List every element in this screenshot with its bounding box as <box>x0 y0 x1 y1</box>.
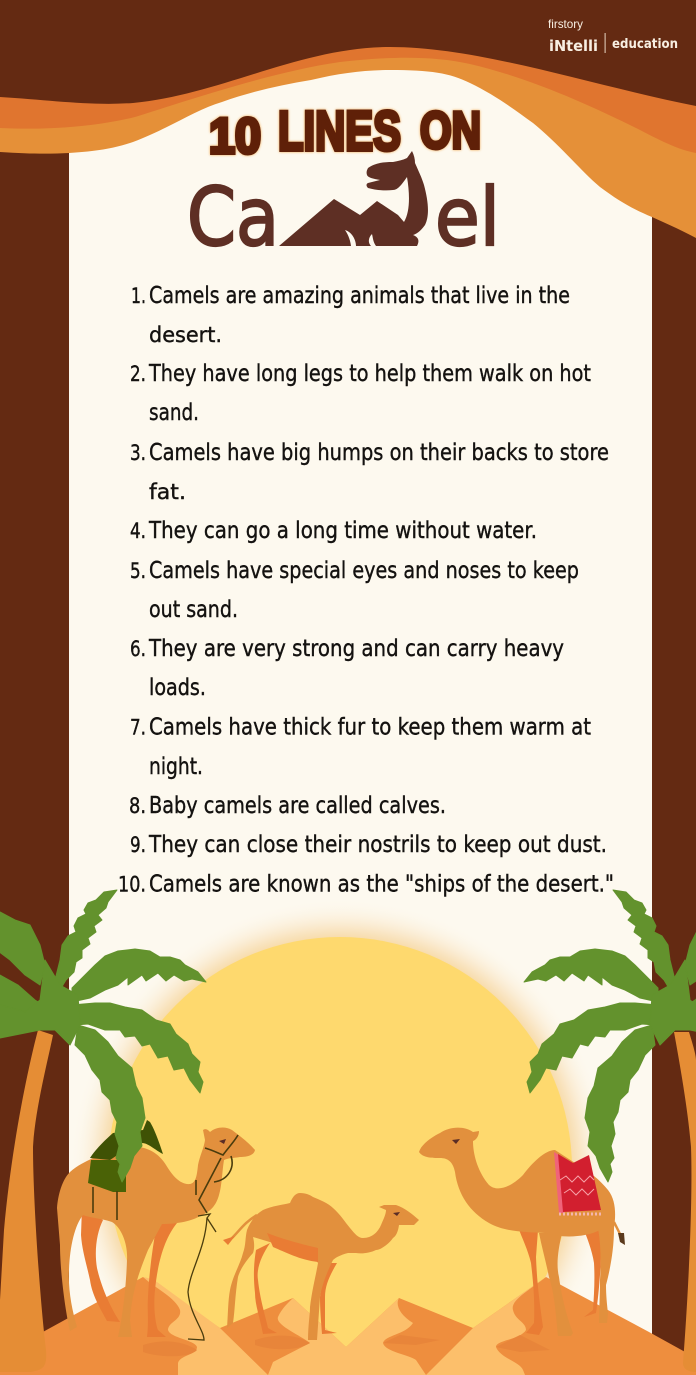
line 6: loads. <box>149 675 206 701</box>
camel and pyramids glyph <box>279 151 428 246</box>
wave: dark orange <box>0 47 696 240</box>
education wordmark: education <box>612 37 678 52</box>
far legs <box>81 1207 177 1337</box>
far legs <box>254 1243 337 1334</box>
line 10: 10. <box>118 872 146 896</box>
letters el: el <box>435 171 500 264</box>
firstory wordmark: firstory <box>548 17 583 31</box>
line 1: desert. <box>149 323 222 348</box>
left camel <box>57 1120 255 1340</box>
right palm leaves <box>524 890 696 1182</box>
saddle <box>90 1120 163 1160</box>
line 2: 2. <box>130 362 146 386</box>
title: 10 lines on: 10 <box>209 108 261 164</box>
line 8: Baby camels are called calves. <box>149 793 446 819</box>
line 2: sand. <box>149 400 199 426</box>
panel: cream content area <box>69 200 652 1375</box>
title: 10 lines on: ON <box>420 102 481 160</box>
line 6 <box>130 636 564 701</box>
line 9: 9. <box>130 833 146 857</box>
line 3: Camels have big humps on their backs to store <box>149 440 609 466</box>
line 9: They can close their nostrils to keep out dust. <box>148 832 607 858</box>
sun glow <box>70 899 610 1375</box>
line 6: 6. <box>130 637 146 661</box>
blanket border <box>554 1152 564 1213</box>
line 3: 3. <box>130 441 146 465</box>
title: 10 lines on <box>209 99 481 164</box>
line 3 <box>130 440 609 505</box>
left brown side <box>0 152 69 300</box>
blanket pattern <box>560 1176 594 1195</box>
line 1: Camels are amazing animals that live in the <box>149 283 570 309</box>
panel top fill <box>69 70 652 300</box>
line 6: They are very strong and can carry heavy <box>148 636 564 662</box>
line 8: 8. <box>129 794 146 818</box>
rope <box>188 1214 216 1340</box>
line 2 <box>130 361 591 426</box>
line 4: 4. <box>130 519 146 543</box>
sun <box>108 937 572 1375</box>
line 7 <box>130 714 591 780</box>
brand logo <box>548 17 678 55</box>
left palm trunk <box>0 1030 53 1372</box>
eye <box>219 1139 226 1144</box>
sand dunes <box>0 1277 696 1375</box>
logo divider <box>605 33 606 53</box>
body <box>419 1128 615 1236</box>
right camel <box>419 1128 625 1336</box>
line 7: night. <box>149 754 203 780</box>
tail tuft <box>223 1236 235 1245</box>
line 1 <box>131 283 570 348</box>
line 5: out sand. <box>149 597 238 623</box>
title: camel wordmark <box>187 151 500 264</box>
tail tuft <box>618 1233 625 1245</box>
saddle straps and bridle <box>93 1135 238 1220</box>
body <box>57 1128 255 1337</box>
letters Ca: Ca <box>187 171 279 264</box>
title: 10 lines on: LINES <box>278 99 401 162</box>
middle camel <box>223 1193 419 1340</box>
eye <box>452 1139 460 1144</box>
line 7: Camels have thick fur to keep them warm at <box>149 714 591 740</box>
far legs <box>518 1227 601 1335</box>
wave: light orange <box>0 58 696 240</box>
glyph arch cutouts <box>345 230 376 246</box>
intelli wordmark: iNtelli <box>549 37 598 55</box>
line 7: 7. <box>130 716 146 740</box>
numbered list of ten lines <box>118 283 614 898</box>
near legs <box>539 1228 614 1336</box>
line 3: fat. <box>149 480 186 505</box>
tail <box>614 1222 621 1236</box>
line 5 <box>130 558 579 623</box>
tail <box>232 1215 257 1238</box>
body <box>227 1193 419 1340</box>
right brown side <box>652 217 696 300</box>
blanket fringe <box>559 1212 601 1216</box>
line 10: Camels are known as the "ships of the desert." <box>149 872 614 898</box>
line 5: 5. <box>130 559 146 583</box>
line 2: They have long legs to help them walk on hot <box>148 361 591 387</box>
eye <box>393 1212 400 1216</box>
belly shade <box>267 1233 318 1262</box>
line 1: 1. <box>131 284 146 308</box>
blanket <box>558 1154 601 1212</box>
right palm trunk <box>674 1032 696 1372</box>
line 5: Camels have special eyes and noses to keep <box>149 558 579 584</box>
left palm leaves <box>0 890 206 1182</box>
line 4: They can go a long time without water. <box>148 518 537 544</box>
